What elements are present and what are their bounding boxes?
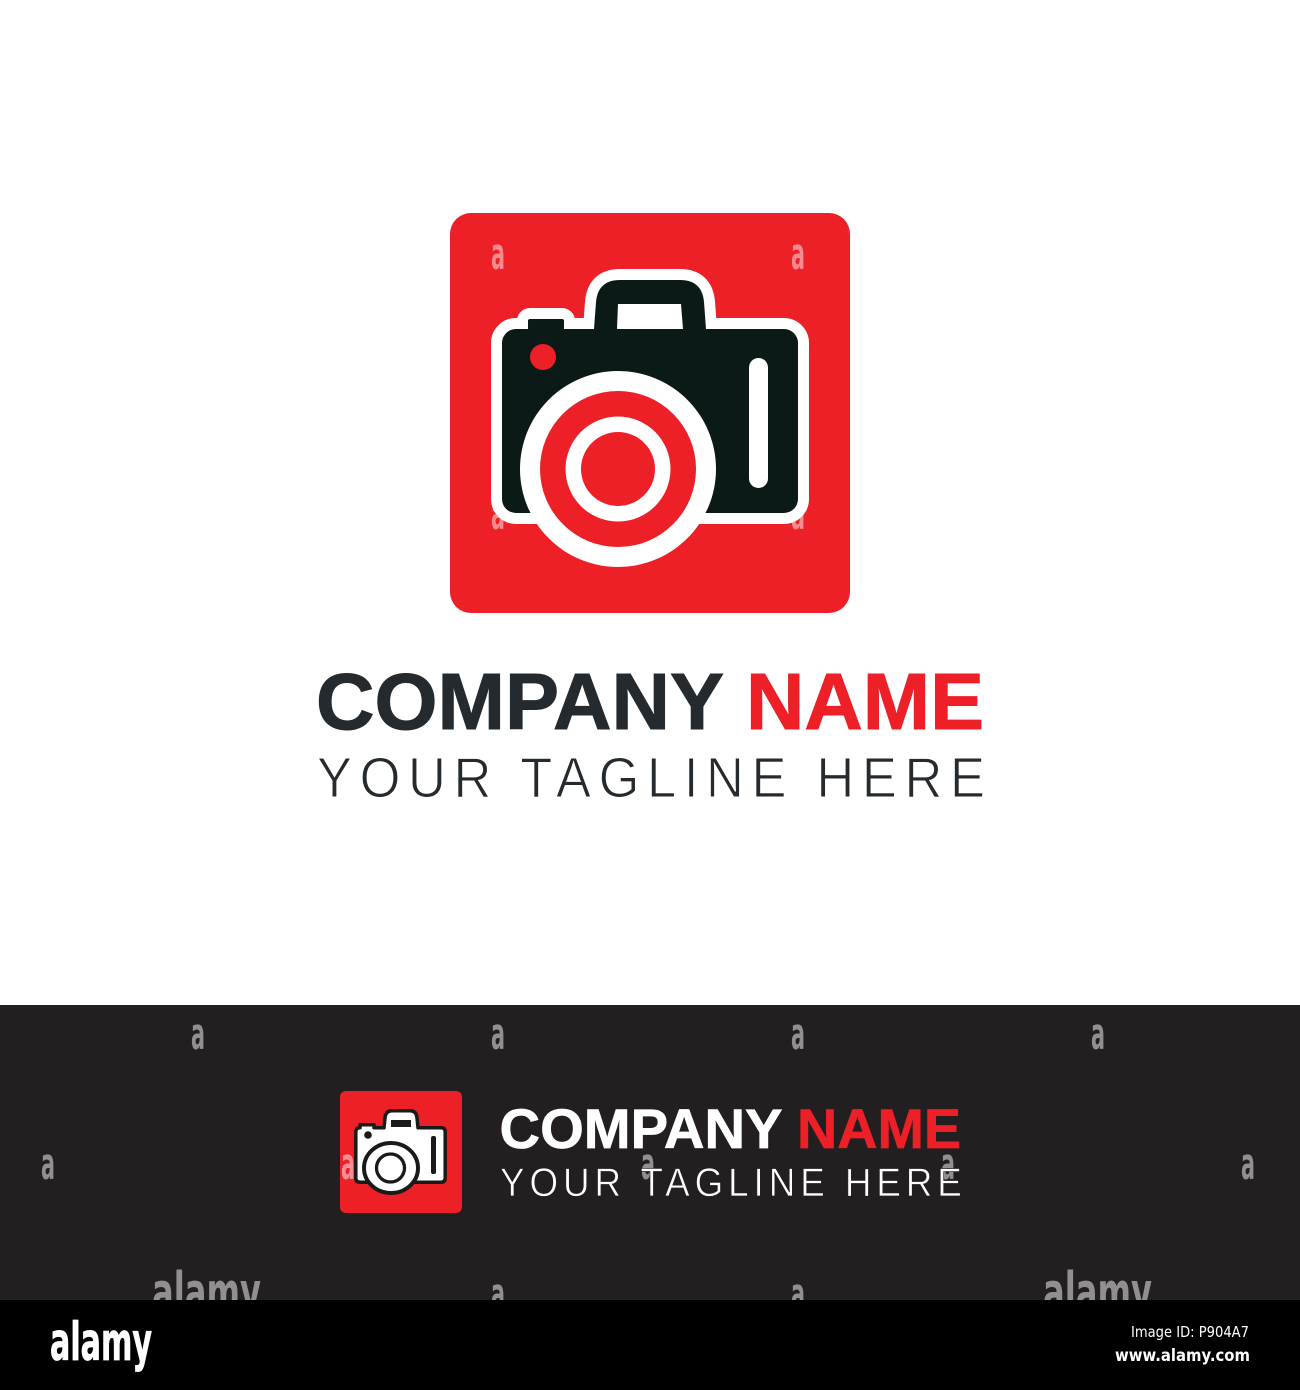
primary tagline: YOUR TAGLINE HERE [317,745,985,809]
side grip slot [749,358,768,488]
watermarks on dark band: a [791,1269,805,1320]
watermarks on dark band: alamy [1043,1261,1152,1324]
secondary tagline: YOUR TAGLINE HERE [500,1161,962,1205]
watermarks on dark band: a [191,1009,205,1060]
secondary logo: small red badge with white camera [340,1091,462,1213]
website: www.alamy.com [1115,1346,1250,1366]
primary company name: COMPANY [316,657,724,746]
camera body [502,280,798,513]
image id: Image ID: P904A7 [1131,1323,1249,1341]
primary company name [316,657,984,746]
small grip slot [431,1136,436,1174]
watermarks on dark band: a [1091,1009,1105,1060]
watermarks on badge: a [491,489,505,540]
small lens [364,1143,418,1193]
watermarks on badge: a [491,229,505,280]
red square badge [450,213,850,613]
watermarks on dark band: alamy [152,1261,261,1324]
text: a [1241,1139,1255,1190]
primary company name: NAME [746,657,984,746]
black footer bar [0,1300,1300,1390]
camera white outline [502,280,798,513]
camera lens rings [520,371,716,567]
watermarks on dark band: a [41,1139,55,1190]
watermarks on dark band [41,1009,1255,1324]
secondary company name [500,1097,961,1160]
watermarks on dark band: a [491,1269,505,1320]
watermarks on dark band: a [941,1139,955,1190]
watermarks on dark band: a [491,1009,505,1060]
red indicator dot [530,344,556,370]
footer alamy logo: alamy [50,1312,152,1373]
small dot [364,1131,372,1139]
small viewfinder [391,1120,411,1127]
viewfinder window [617,304,683,329]
secondary logo: small red badge with white camera: a [341,1139,355,1190]
watermarks on badge [491,229,805,540]
secondary company name: COMPANY [500,1097,782,1160]
primary logo: red rounded square with camera: a [791,229,805,280]
secondary company name: NAME [797,1097,961,1160]
primary logo: red rounded square with camera: a [791,489,805,540]
small camera silhouette [356,1111,445,1182]
watermarks on dark band: a [641,1139,655,1190]
dark band [0,1005,1300,1300]
primary logo: red rounded square with camera [450,213,850,613]
watermarks on dark band: a [791,1009,805,1060]
